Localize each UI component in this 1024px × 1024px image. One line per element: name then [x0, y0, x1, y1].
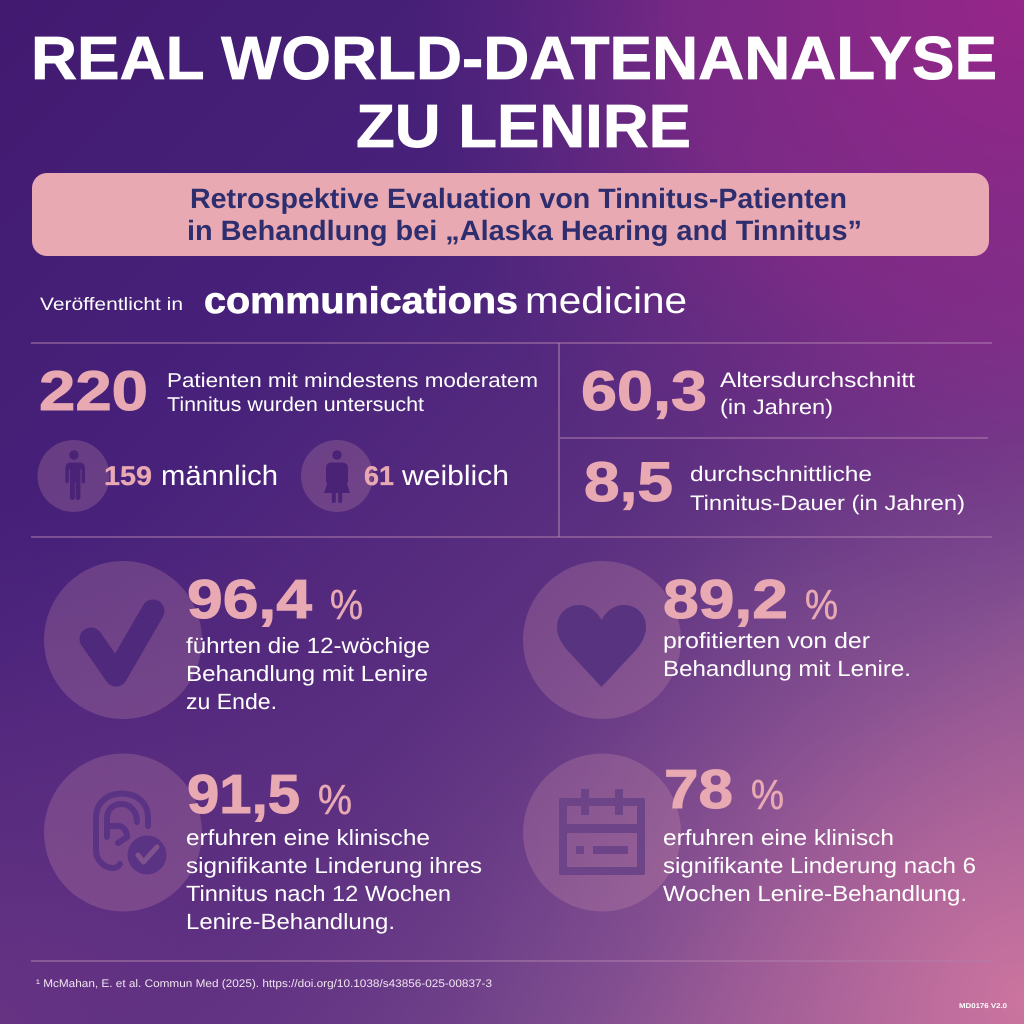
result: 96,4 %: % [330, 581, 363, 628]
result: 89,2 %: profitierten von der [663, 628, 870, 653]
male count: männlich [161, 460, 278, 491]
title: ZU LENIRE [356, 92, 691, 160]
stat: tinnitus duration [584, 450, 965, 515]
stat: 220 patients: Patienten mit mindestens moderatem [167, 370, 538, 392]
result: 96,4 % [186, 568, 430, 714]
journal logo: medicine [525, 280, 687, 321]
result: 91,5 %: signifikante Linderung ihres [186, 853, 482, 878]
stat: 220 patients: Tinnitus wurden untersucht [167, 394, 424, 416]
result: 78 %: erfuhren eine klinisch [663, 825, 894, 850]
result: 91,5 %: erfuhren eine klinische [186, 825, 430, 850]
result: 78 %: Wochen Lenire-Behandlung. [663, 881, 967, 906]
stat: mean age [581, 359, 915, 422]
result: 91,5 %: Tinnitus nach 12 Wochen [186, 881, 451, 906]
subtitle banner: in Behandlung bei „Alaska Hearing and Tinnitus” [187, 215, 862, 246]
result: 96,4 %: führten die 12-wöchige [186, 633, 430, 658]
icon: check mark [44, 561, 202, 719]
result: 78 %: % [751, 771, 784, 818]
result: 91,5 %: 91,5 [187, 763, 300, 825]
subtitle banner [32, 173, 989, 256]
result: 78 % [663, 758, 976, 906]
male count: 159 [104, 461, 152, 491]
male count [104, 460, 278, 491]
icon: heart [523, 561, 681, 719]
document code: MD0176 V2.0 [959, 1003, 1007, 1010]
result: 78 %: signifikante Linderung nach 6 [663, 853, 976, 878]
stat: mean age: (in Jahren) [720, 396, 833, 419]
published in label: Veröffentlicht in [40, 294, 183, 314]
title [31, 24, 997, 160]
result: 89,2 %: Behandlung mit Lenire. [663, 656, 911, 681]
icon: male person [38, 440, 110, 512]
result: 89,2 % [663, 568, 911, 681]
title: REAL WORLD-DATENANALYSE [31, 24, 997, 92]
female count [364, 460, 509, 491]
stat: mean age: 60,3 [581, 359, 707, 422]
result: 96,4 %: zu Ende. [186, 689, 277, 714]
result: 78 %: 78 [664, 758, 733, 820]
icon: female person [301, 440, 373, 512]
stat: mean age: Altersdurchschnitt [720, 369, 915, 392]
result: 96,4 %: Behandlung mit Lenire [186, 661, 428, 686]
footnote: ¹ McMahan, E. et al. Commun Med (2025). https://doi.org/10.1038/s43856-025-00837-3 [36, 978, 492, 990]
female count: weiblich [401, 460, 509, 491]
result: 96,4 %: 96,4 [187, 568, 312, 630]
icon: ear with check [44, 754, 202, 912]
result: 89,2 %: 89,2 [663, 568, 788, 630]
female count: 61 [364, 461, 394, 491]
subtitle banner: Retrospektive Evaluation von Tinnitus-Patienten [190, 183, 847, 214]
stat: 220 patients: 220 [39, 359, 148, 422]
result: 91,5 %: % [318, 776, 352, 823]
result: 91,5 % [186, 763, 482, 934]
stat: tinnitus duration: 8,5 [584, 450, 673, 513]
journal logo [204, 280, 687, 321]
stat: tinnitus duration: durchschnittliche [690, 463, 872, 486]
result: 91,5 %: Lenire-Behandlung. [186, 909, 395, 934]
stat grid dividers [31, 343, 992, 961]
stat: tinnitus duration: Tinnitus-Dauer (in Jahren) [690, 492, 965, 515]
icon: calendar [523, 754, 681, 912]
stat: 220 patients [39, 359, 538, 422]
result: 89,2 %: % [805, 581, 838, 628]
journal logo: communications [204, 280, 518, 321]
